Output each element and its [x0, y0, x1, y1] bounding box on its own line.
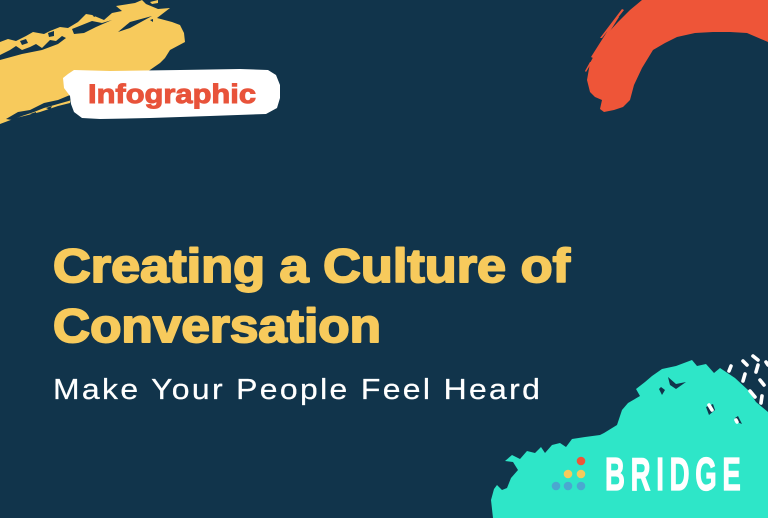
label text: Infographic [88, 79, 256, 109]
main title: Creating a Culture of [53, 239, 570, 292]
main title [53, 239, 570, 352]
main title: Conversation [53, 299, 381, 352]
teal brush shape [491, 360, 768, 518]
Bridge logo [552, 450, 747, 501]
logo dots icon [552, 457, 585, 490]
white confetti dashes [709, 356, 768, 422]
white brush label [63, 69, 280, 119]
white label with Infographic heading [63, 69, 280, 119]
logo wordmark: BRIDGE [605, 450, 747, 501]
orange brush arc [585, 0, 768, 112]
yellow brush stroke [0, 0, 185, 124]
subtitle: Make Your People Feel Heard [53, 373, 542, 406]
